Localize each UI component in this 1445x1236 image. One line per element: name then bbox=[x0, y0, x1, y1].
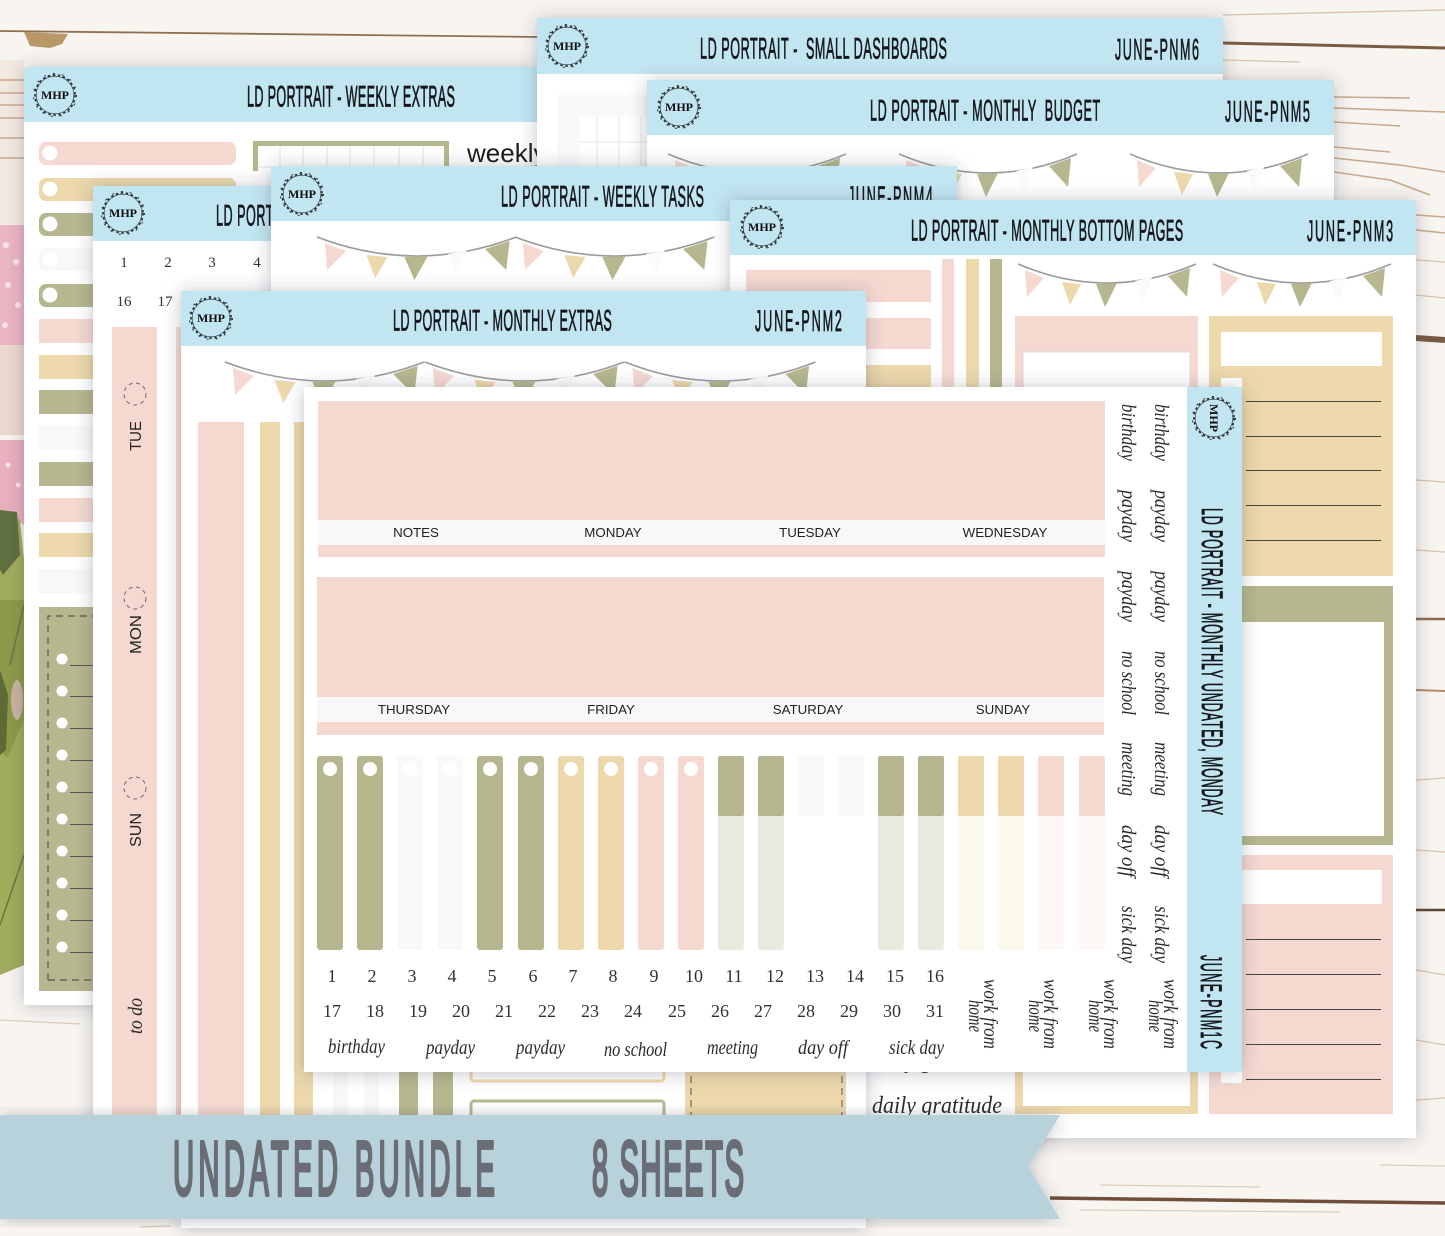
sheet: weekly tasks bbox=[271, 166, 957, 466]
header: small dashboards: JUNE-PNM6 bbox=[1115, 32, 1199, 66]
header: weekly extras bbox=[24, 67, 540, 122]
date numbers 1 to 16: 16 bbox=[926, 966, 944, 986]
day panel: thursday to sunday: FRIDAY bbox=[587, 702, 635, 717]
rotated event labels, inner column: payday bbox=[1117, 569, 1139, 622]
rotated event labels, outer column: meeting bbox=[1150, 742, 1172, 796]
date numbers: 2 bbox=[164, 255, 172, 271]
day panel: thursday to sunday: SATURDAY bbox=[773, 702, 843, 717]
sheet: monthly bottom pages bbox=[730, 200, 1416, 1138]
day panel: thursday to sunday: THURSDAY bbox=[378, 702, 450, 717]
date numbers: 16 bbox=[116, 294, 132, 310]
vertical stripes bbox=[942, 259, 1002, 399]
event labels row: payday bbox=[424, 1037, 475, 1059]
date numbers 1 to 16: 11 bbox=[725, 966, 743, 986]
date numbers: 1 bbox=[120, 255, 128, 271]
pink day strip: SUN bbox=[128, 813, 145, 847]
date numbers: 3 bbox=[208, 255, 216, 271]
rotated event labels, outer column: no school bbox=[1150, 651, 1172, 715]
date numbers bbox=[116, 255, 261, 310]
header: small dashboards: LD PORTRAIT - SMALL DASHBOARDS bbox=[700, 31, 947, 65]
work from home labels: work from bbox=[1039, 979, 1061, 1049]
rotated event labels, outer column: sick day bbox=[1150, 906, 1172, 963]
header: monthly bottom pages bbox=[730, 200, 1416, 255]
event labels row: meeting bbox=[707, 1037, 758, 1059]
green checklist box bbox=[39, 607, 99, 991]
side header bbox=[1187, 387, 1242, 1072]
header: small dashboards: MHP bbox=[553, 39, 581, 53]
event labels row: payday bbox=[514, 1037, 565, 1059]
work from home labels: work from bbox=[1159, 979, 1181, 1049]
day panel: notes to wednesday: TUESDAY bbox=[779, 525, 841, 540]
yellow outline box bbox=[1015, 1040, 1198, 1114]
date numbers 1 to 16: 2 bbox=[368, 966, 376, 986]
rotated event labels, inner column: payday bbox=[1117, 488, 1139, 542]
text: daily gratitude: daily gratitude bbox=[872, 1048, 1002, 1074]
rotated event labels, inner column: sick day bbox=[1117, 906, 1139, 963]
header: monthly budget: LD PORTRAIT - MONTHLY BUDGET bbox=[870, 93, 1100, 127]
yellow lined box bbox=[1209, 316, 1393, 576]
rotated event labels, outer column: birthday bbox=[1150, 404, 1172, 461]
pink lined box bbox=[1209, 855, 1393, 1114]
grid box bbox=[253, 141, 449, 176]
header: monthly bottom pages: LD PORTRAIT - MONTHLY BOTTOM PAGES bbox=[911, 213, 1183, 247]
dashboard grid bbox=[557, 95, 650, 170]
date numbers 17 to 31 bbox=[323, 1001, 944, 1021]
pill stickers bbox=[39, 142, 236, 307]
work from home labels: work from bbox=[979, 979, 1001, 1049]
work from home labels: work from bbox=[1099, 979, 1121, 1049]
event labels row: birthday bbox=[328, 1036, 385, 1058]
work from home labels: home bbox=[1024, 1000, 1046, 1032]
two-tone tabs bbox=[718, 756, 1105, 950]
date numbers 17 to 31: 20 bbox=[452, 1001, 470, 1021]
header: weekly tasks: MHP bbox=[288, 187, 316, 201]
date numbers 1 to 16: 10 bbox=[685, 966, 703, 986]
header: calendar strips bbox=[93, 186, 304, 241]
rotated event labels, inner column: day off bbox=[1117, 825, 1139, 879]
header: monthly extras: JUNE-PNM2 bbox=[755, 304, 842, 338]
sheet: monthly extras bbox=[181, 291, 866, 1228]
date numbers 1 to 16: 3 bbox=[408, 966, 416, 986]
header: monthly bottom pages: MHP bbox=[748, 220, 776, 234]
date numbers 1 to 16: 8 bbox=[608, 966, 618, 986]
event labels row bbox=[328, 1036, 944, 1061]
colour blocks bbox=[39, 319, 99, 593]
header: monthly extras bbox=[181, 291, 866, 346]
day panel: notes to wednesday: WEDNESDAY bbox=[963, 525, 1047, 540]
date numbers 17 to 31: 17 bbox=[323, 1001, 341, 1021]
banner text: undated bundle: UNDATED BUNDLE bbox=[173, 1126, 495, 1212]
date numbers 1 to 16: 1 bbox=[328, 966, 336, 986]
outlined label boxes bbox=[471, 1040, 664, 1142]
header: monthly budget: MHP bbox=[665, 100, 693, 114]
date numbers 17 to 31: 23 bbox=[581, 1001, 599, 1021]
date numbers 17 to 31: 18 bbox=[366, 1001, 384, 1021]
date numbers 1 to 16 bbox=[328, 966, 944, 986]
date numbers 17 to 31: 19 bbox=[409, 1001, 427, 1021]
pink day strip: TUE bbox=[128, 421, 145, 451]
sheet: calendar strips bbox=[93, 186, 304, 1186]
date numbers 1 to 16: 12 bbox=[766, 966, 784, 986]
pink day strip: MON bbox=[128, 615, 145, 654]
header: weekly tasks bbox=[271, 166, 957, 221]
pink note box bbox=[1015, 316, 1198, 406]
side header: MHP bbox=[1207, 404, 1221, 432]
rotated event labels, inner column: birthday bbox=[1117, 404, 1139, 461]
bunting: monthly extras bbox=[225, 362, 815, 405]
header: weekly tasks: JUNE-PNM4 bbox=[848, 180, 933, 214]
day panel: notes to wednesday: MONDAY bbox=[584, 525, 642, 540]
event labels row: sick day bbox=[889, 1037, 944, 1059]
header: calendar strips: MHP bbox=[109, 206, 137, 220]
date numbers 17 to 31: 24 bbox=[624, 1001, 642, 1021]
date numbers 17 to 31: 28 bbox=[797, 1001, 815, 1021]
date numbers: 17 bbox=[158, 294, 173, 310]
header: monthly bottom pages: JUNE-PNM3 bbox=[1307, 214, 1393, 248]
rotated event labels, outer column: payday bbox=[1150, 569, 1172, 622]
date numbers 17 to 31: 31 bbox=[926, 1001, 944, 1021]
header: weekly extras: MHP bbox=[41, 88, 69, 102]
header: weekly extras: LD PORTRAIT - WEEKLY EXTRAS bbox=[247, 79, 455, 113]
date numbers 17 to 31: 25 bbox=[668, 1001, 686, 1021]
date numbers 1 to 16: 7 bbox=[568, 966, 578, 986]
header: monthly extras: LD PORTRAIT - MONTHLY EXTRAS bbox=[393, 303, 612, 337]
header: monthly budget: JUNE-PNM5 bbox=[1225, 94, 1310, 128]
bunting: weekly tasks bbox=[317, 237, 714, 280]
event labels row: no school bbox=[604, 1039, 667, 1061]
header: monthly extras: MHP bbox=[197, 311, 225, 325]
date numbers: 4 bbox=[253, 255, 261, 271]
date numbers 17 to 31: 22 bbox=[538, 1001, 556, 1021]
rotated event labels, outer column bbox=[1150, 404, 1172, 963]
text: daily gratitude bbox=[872, 1048, 1002, 1119]
bunting: bottom pages bbox=[1018, 264, 1391, 307]
day panel: thursday to sunday bbox=[317, 577, 1104, 735]
date numbers 17 to 31: 30 bbox=[883, 1001, 901, 1021]
work from home labels: home bbox=[1144, 1000, 1166, 1032]
date numbers 17 to 31: 26 bbox=[711, 1001, 729, 1021]
event labels row: day off bbox=[798, 1037, 850, 1059]
text: daily gratitude: daily gratitude bbox=[872, 1093, 1002, 1119]
date numbers 1 to 16: 15 bbox=[886, 966, 904, 986]
rotated event labels, outer column: day off bbox=[1150, 825, 1172, 879]
side header: LD PORTRAIT - MONTHLY UNDATED, MONDAY bbox=[1195, 508, 1229, 815]
rotated event labels, inner column: meeting bbox=[1117, 742, 1139, 796]
sheet: small dashboards bbox=[537, 18, 1223, 318]
stripes bbox=[198, 422, 453, 1122]
green frame box bbox=[1209, 586, 1393, 845]
vertical tabs with dots bbox=[317, 756, 704, 950]
sheet: weekly extras bbox=[24, 67, 546, 1005]
flowers and leaves bbox=[0, 225, 24, 975]
yellow dashed box bbox=[685, 1040, 846, 1125]
rotated event labels, inner column: no school bbox=[1117, 651, 1139, 715]
day panel: notes to wednesday bbox=[318, 401, 1105, 557]
day panel: thursday to sunday: SUNDAY bbox=[976, 702, 1030, 717]
date numbers 17 to 31: 21 bbox=[495, 1001, 513, 1021]
rotated event labels, outer column: payday bbox=[1150, 488, 1172, 542]
work from home labels: home bbox=[1084, 1000, 1106, 1032]
header: monthly budget bbox=[647, 80, 1334, 135]
front sheet: monthly undated bbox=[304, 387, 1242, 1072]
side header: JUNE-PNM1C bbox=[1194, 955, 1228, 1049]
ribbon banner bbox=[0, 1115, 1060, 1219]
date numbers 17 to 31: 27 bbox=[754, 1001, 772, 1021]
day panel: notes to wednesday: NOTES bbox=[393, 525, 439, 540]
date numbers 1 to 16: 4 bbox=[448, 966, 456, 986]
text: weekly: weekly bbox=[466, 138, 546, 168]
pink day strip bbox=[112, 327, 182, 1127]
header: small dashboards bbox=[537, 18, 1223, 74]
date numbers 1 to 16: 14 bbox=[846, 966, 864, 986]
date numbers 1 to 16: 9 bbox=[650, 966, 658, 986]
work from home labels: home bbox=[964, 1000, 986, 1032]
pink day strip: to do bbox=[125, 998, 147, 1034]
date numbers 17 to 31: 29 bbox=[840, 1001, 858, 1021]
work from home labels bbox=[964, 979, 1181, 1049]
date numbers 1 to 16: 6 bbox=[528, 966, 538, 986]
banner text: 8 sheets: 8 SHEETS bbox=[592, 1126, 744, 1212]
date numbers 1 to 16: 13 bbox=[806, 966, 824, 986]
bunting: budget bbox=[668, 154, 1308, 197]
left blocks bbox=[746, 270, 931, 405]
date numbers 1 to 16: 5 bbox=[488, 966, 496, 986]
header: calendar strips: LD PORTRAIT bbox=[216, 198, 304, 232]
rotated event labels, inner column bbox=[1117, 404, 1139, 963]
sheet: monthly budget bbox=[647, 80, 1334, 380]
header: weekly tasks: LD PORTRAIT - WEEKLY TASKS bbox=[501, 179, 704, 213]
